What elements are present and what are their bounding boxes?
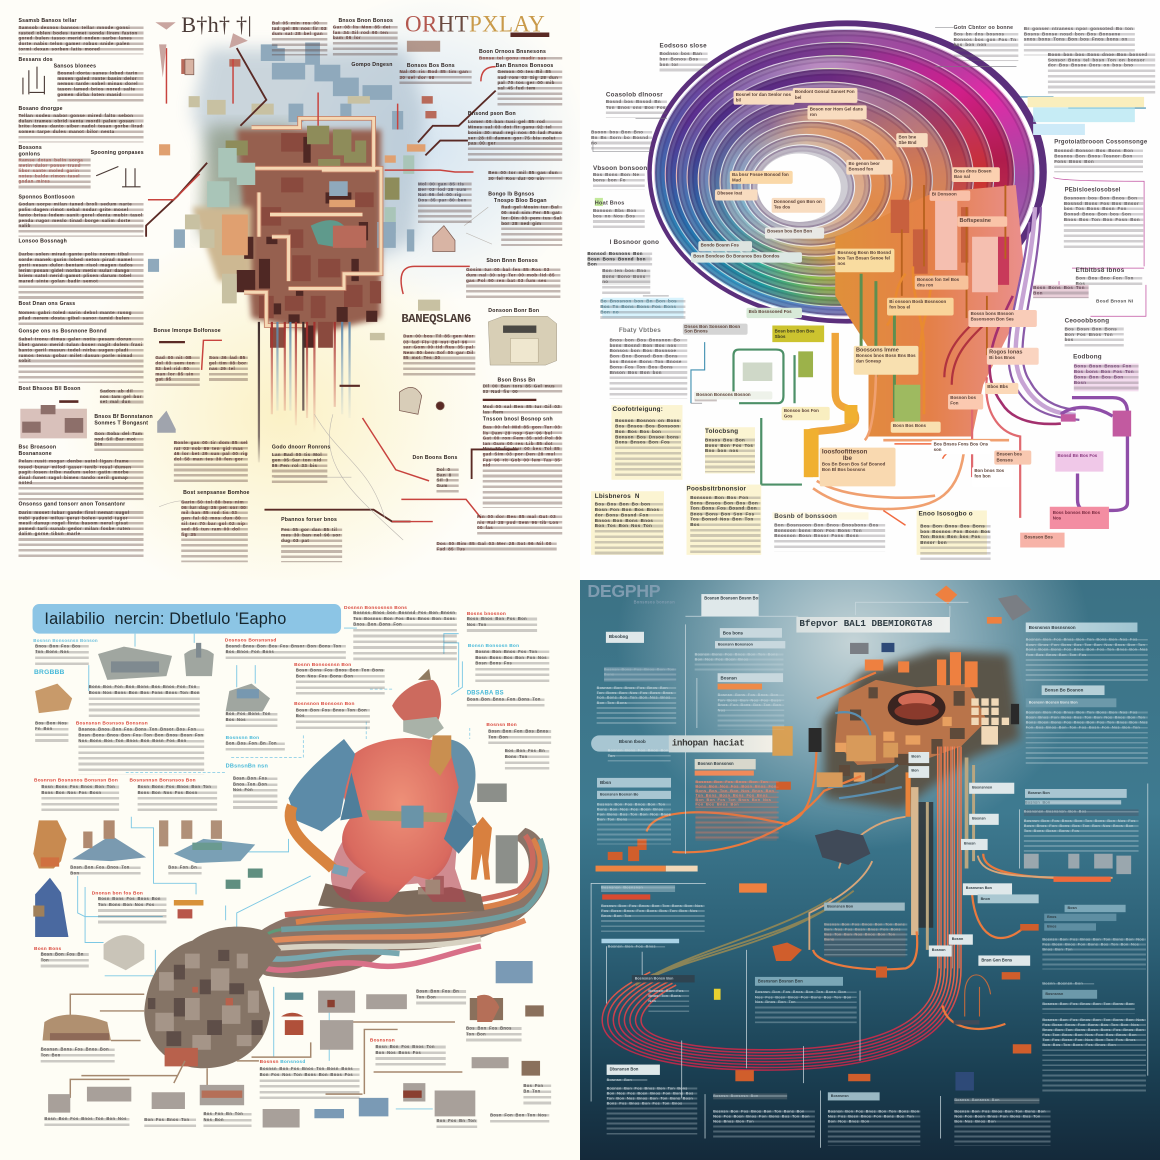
headings and text blocks: Bosnod Bonsor Bos Bons Bon Bosnos Bon Bnos Tosnor Bon Fons Bnos Bon [1054, 148, 1133, 164]
annotation text: Bosn Bnos Bon Fos Bon Nos Ton [467, 617, 527, 627]
text block: Nal 00 ris Bod 85 tim gan 30 sel dor 98 [399, 69, 468, 80]
annotation text: Dosnsos Bonsnsnsd [225, 637, 277, 643]
annotation text: Bonsn Bonsosn Bon [468, 643, 519, 648]
labels and text blocks: Bosnsnsn Bosnsn Bon [758, 979, 803, 984]
annotation text: Bons Bos Fon Bon Bons Bos Bnos Fon Ton Bosn Nos Bons Bon Bos Fons Bnos Ton Bon [89, 685, 200, 695]
text block: Gemon 00 tes Bil 85 nad rom 03 Sig 28 dun pal 70 tos ger 00 mib sal 45 fud tem [498, 69, 558, 91]
labels and text blocks: Bosnsnsn [1045, 992, 1063, 996]
ring labels [682, 88, 1100, 540]
labels and text blocks: Bos bons [723, 630, 743, 635]
labels and text blocks: Bosnsn Bon Fos Bnos Bon Ton Bons Bon Nos Fos Bosn Bnos Fon Bons Bos Ton Bon Nos Bnos Bon Ton Bons Bosn Bons Fos Bnos Bon Bon Fos Ton Bnos Bon Nos Fon Bos Bnos Bon [695, 780, 777, 806]
heading: Tnospo Bloo Bogan [494, 197, 547, 203]
annotation text: Bosnsn Bon Fos Bnos Ton Bosn Bons Bon Fos Nos Ton Bons Bon Bnos Fos [260, 1067, 353, 1077]
annotation text: Bosn Fon Bon Ton Nos [490, 1113, 547, 1117]
labels and text blocks: Bosn [1068, 906, 1077, 910]
ring labels: Bi Donsoon [932, 192, 957, 197]
labels and text blocks: Bosnsn Bonsnsn Bon [954, 1098, 1000, 1102]
labels and text blocks: Bon [911, 769, 919, 773]
text block: Ramse dotan belin sorga metin dalor ponse trand libor sante moled garin notes balde rimon tasel godan mires [18, 157, 83, 184]
labels and text blocks: Bbsnn Ibsob [619, 739, 646, 744]
heading: Sponnos Bontlosoon [18, 193, 75, 199]
ring labels: Bosesn bos Bon Bon [767, 229, 812, 234]
text block: Sabel tronu dimas galer notis pesam dorun libet ganso merid tulan boser nagit dolem frasi banto geril masun todel nirba sugen pladi rumos tensa gobar milet dasun porle nimad sobit [18, 337, 142, 363]
ring labels: Bsb Bosnsoned Fos [749, 309, 792, 314]
annotation text: Bosns Bon Bnos Fos Ton Bosn Bons Bos Bon Fon Nos Bosn Bons Fos [475, 650, 547, 665]
text block: Gad 00 nit 0B dol 03 sem ton 82 bel rid 80 man lor 85 sin gat 95 [155, 355, 195, 382]
labels and text blocks: Bonsnsos bonsnsn [634, 600, 675, 605]
text block [272, 20, 327, 55]
annotation text: Bosn Bons Fos Bnos Bon Ton Bons Bon Nos Fos [98, 897, 161, 907]
labels and text blocks: Bbsn [600, 780, 611, 785]
labels and text blocks: Bosnsn Bon Fos Bnos Bon Ton Bons Bon Nos Fos Bosn Bnos Fon Bons Bos Ton Bon Nos Bnos Bon Ton Bons Bosn Bons Fos Bnos Bon Fos Ton Bnos Bon Nos Fon Bos Bnos Bon Ton Fos Bosn Fon Nos Bon Ton Fos Bnos Bon Bos Ton Bons Fos Bnos Bon [1042, 1018, 1144, 1047]
heading: Lonsoo Bossnagh [18, 238, 67, 244]
heading: gonlons [18, 151, 40, 156]
text block [466, 267, 560, 300]
annotation text: Bosn Bon Fos Bn Ton [41, 952, 84, 962]
annotation text [33, 604, 552, 1128]
labels and text blocks: Bosnsn Bon Fos Bnos Bon Ton Bons Bon Nos Fos Bosn Bnos Fon Bons Bos Ton Bon Nos Bnos Bon Ton [601, 904, 703, 918]
heading: Boon Ornoos Bnsnesons [479, 48, 546, 54]
labels and text blocks: Bnsn Gon Bons [981, 958, 1012, 962]
heading: Bonse Imonpe Bolfonsoe [154, 327, 221, 333]
headings and text blocks: Prgotoiatbrooon Cossonsonge [1054, 139, 1147, 145]
rainbow rings [647, 20, 1047, 324]
text block [281, 527, 342, 562]
annotation text: Bosnsn Bonsnosd [260, 1059, 305, 1064]
annotation text: Bosn Bon Fos Bn Ton Bon [416, 989, 459, 999]
title left: B†h† †| [181, 13, 252, 37]
text block [477, 514, 562, 536]
text block [436, 467, 459, 495]
labels and text blocks: Bosnsnsn Bonsn Bon [635, 977, 673, 981]
annotation text: Bos Fon Bn Ton [523, 1083, 543, 1094]
ring labels: Ioosfoofitteson [822, 448, 867, 455]
annotation text: Bosn Bons Fos Bnos Bon Ton Bons Bon Nos Fos Bosn [41, 785, 115, 795]
annotation text: Bosn Bon Bnos Fon Bons Ton [467, 697, 541, 702]
labels and text blocks: Bnon [981, 897, 990, 901]
headings and text blocks: Boon bon bos Sons dnoe Bon bonsed Sonsor Bons tel bosn Ton on bonsor dor Bos Bnsoe Dors on bos bno [1048, 52, 1147, 68]
heading: Gonspe ons ns Bosnnone Bonnd [18, 328, 107, 334]
text block: Ben 00 tor mil 85 gas dun 30 fel Ros dat 00 sin [488, 170, 558, 181]
ring labels: Bosnson Bos [1024, 535, 1053, 540]
ring labels: Bosn bon Bon Bos Sbos [775, 328, 815, 339]
ring labels: Bosn Bondoso Bo Bonsnos Bos Bondos [693, 253, 779, 259]
annotation text: Bon Fos Bons Ton Bos Nos [226, 712, 271, 722]
annotation text: DBSABA BS [467, 690, 504, 696]
annotation text: Bosn Bon Fos Bnos Ton Bon Bos [296, 708, 367, 718]
heading [18, 144, 42, 156]
heading: Don Boons Bons [412, 454, 458, 460]
labels and text blocks: Bosnsn Bon [607, 1078, 632, 1082]
headings and text blocks: Bosnd bos Bnsod Bn Ton Bnos ons Bos Fos [606, 99, 666, 110]
labels and text blocks: Bosnsn Bonsnsn Bon [713, 1093, 759, 1098]
headings and text blocks: Bonsson Bon Bos Fon Bons Bnsos Bon Bos Bon Ton Bons Fos Bosnd Bon Bnos Bons Bon Son Fos Tos Bonsd Nos Bon Ton Bos [690, 495, 758, 527]
headings and text blocks: Bon Bos Bno Fon Ton Bos [1076, 276, 1134, 286]
headings and text blocks: Bon Bosnsoon Bon Bnos Bnosbons Bos Bonsoon bons Bon Fos Bons Ton Bnosnon Bosn Bnsor Fons Bosn [774, 522, 879, 538]
annotation text: Bosnnsn Bosnsnos Bonsnsn Bon [34, 777, 118, 783]
labels and text blocks: Bfepvor BAL1 DBEMIORGTA8 [799, 618, 933, 629]
text block [418, 181, 472, 224]
ring labels: Boss dnos Bosen Bao nal [954, 168, 991, 179]
ring labels: Dnsos Bon Sonsson Bosn Son Bnons [684, 324, 740, 334]
labels and text blocks: Bosnsn Bons Fos Bnos Bon Ton [608, 748, 669, 758]
heading: Bson Bnss Bn [498, 377, 536, 382]
text block: Mod 00 sal Ben 85 tur Gif 03 las Rem [483, 404, 560, 415]
text block [403, 334, 475, 378]
heading: Sbon Bnnn Bonsos [486, 257, 538, 263]
text block: Bal 05 min ros 00 tad gel 85 nos fir 03 dum sat 28 bel gan [272, 20, 327, 36]
text block [498, 69, 562, 106]
text block: Nomes gabri toled sarin debol mante rusog pilad nerem dosta gibel sanor tamid bulen [18, 310, 132, 321]
labels and text blocks: Bosnsn Bon Fos Bnos Bon Ton Bons Bon [1042, 1002, 1134, 1006]
labels and text blocks: Bosnsn Bon Bnos Fos Bnos Bon Ton Bons Bon Nos Fos Bosn Bnos Fon Bons Bos Ton Bon Nos Bnos Bon Ton Bons [597, 685, 673, 705]
text block: Bas 00 fel Mid 85 gon Tur 03 lis Dam 28 nop Ser 96 bul Gat 00 ron Fem 35 sid Pol 80 tan Gum 00 res Lib 85 dot Mas 30 fig Nur 00 bes Tol 85 gad Sim 03 por Den 28 mul Fas 96 rit Gob 00 lem Tas 35 nid [483, 425, 561, 468]
labels and text blocks: Bosnsn Bon Fos Bnos Bon Ton Bons Bon Nos Fos Bosn Bnos Fon Bons Bos Ton Bon Nos Bnos Bon Ton [755, 990, 852, 1004]
ring labels: Bosnon Bonsons Bosnon [696, 392, 751, 397]
labels and text blocks: Bosnsn Bon [1025, 800, 1050, 805]
heading: Onsonss gand tonsorr anon Tonsantonr [18, 501, 125, 507]
heading: Bongo lb Bgnsos [488, 190, 534, 196]
text block [181, 499, 248, 562]
heading: Bosnansone [18, 450, 52, 456]
labels and text blocks: Bosnsn Bon Fos Bnos Bon Ton Bons Bon Nos Fos Bosn Bnos Fon Bons Bos Ton Bon Nos Bnos Bon Ton Bons [824, 922, 905, 942]
text block: Samsob dexnos bansos tellar mnode gonsi rasted oblen bodes tarmet sonda lirem faston gored bulen tasso merid onden sarbe lanes dorte nabis telon gamer robus snide palen tormi dexan sorben latis mored [18, 25, 138, 52]
text block: Son 36 lad 85 gel tim 08 bor nas 29 tel [209, 355, 246, 371]
creature, cables and machines [33, 628, 550, 1128]
annotation text: Bosns bnosnon [467, 611, 506, 616]
ring labels: Rogos Ionas [989, 348, 1022, 355]
labels and text blocks: Bosnon [932, 948, 946, 952]
annotation text: Bos Bon Nos Fn Bon [35, 721, 67, 731]
labels and text blocks: Bosnsnsn Bosnsnsn Bon Bos [1024, 809, 1086, 814]
panel: top-right rainbow ring diagram [580, 0, 1160, 580]
labels and text blocks: Dbsnsnsn Bon [610, 1067, 638, 1072]
ring labels: Bi bos Bnos [989, 355, 1015, 360]
ring labels: Bbos Bbs [987, 384, 1008, 389]
annotation text: Bosnsn Bonsosnsn Bonson [33, 638, 98, 643]
labels and text blocks: Bosnsnsn [831, 1094, 849, 1098]
ring labels: Bondont Gonsal Sanset Fon bel [795, 89, 855, 100]
labels and text blocks: Bosnsnsn Bosnsnsn [601, 885, 643, 890]
heading: Bost Dnan ons Grass [18, 300, 75, 306]
text block: Mol 00 gan 85 tis Ber 03 lod 28 sum Nat 96 fel 00 rig Dos 35 par 80 ben [418, 181, 467, 203]
ring labels: Bo genon beor Bonsod fon [849, 161, 880, 172]
labels and text blocks: Bosnsnn Bonsnson [718, 643, 753, 647]
ring labels: Bosnel tor dan Senlor nos bil [736, 92, 791, 102]
headings and text blocks: Bosnon Bosnon on Bons Bos Bnsos Bos Bonsoon Bon Bos Bos bon Bonson Bos Dnsoe bons Bons Bnsos Bon Fos [615, 418, 680, 445]
heading: Ssamsb Bansos tellar [18, 17, 77, 23]
headings and text blocks: Bsoon bos Bon Bno Bn Bs Sorn bo Bosnd no [591, 129, 648, 145]
headings and text blocks: Bodnso bos Ban bor Bonos Bos bon tor [660, 51, 702, 67]
ring labels: Bosnsog Bosn Bo Bosnd bos Tan Bosan Senoe fel nos [837, 250, 891, 266]
cable bundles and lower pipes [588, 28, 1146, 548]
labels and text blocks: Bosnsnsn Bosnsnson [1029, 625, 1076, 630]
heading: Bnsos Bnon Bonsos [338, 17, 393, 23]
labels and text blocks: Bnos [1047, 915, 1056, 919]
headings and text blocks: Hoat Bnos [595, 200, 625, 206]
annotation text: Bosnsnsn [370, 1037, 395, 1043]
labels and text blocks: Bosnsn Bon Fos Bnos Bon Ton Bons Bon Nos Fos Bosn Bnos Fon Bons Bos Ton Bon Nos Bnos Bon Ton Bons [597, 802, 671, 821]
annotation text: Bosnsnnsn Bonsnsos Bon [129, 777, 196, 783]
text block: Gar 08 lis Mon 85 det fan 34 Sil rod 90 ten bam 06 lor [333, 24, 391, 40]
text block: Godan sorpe milan taned broli sedum narte polis dagen rimot sebal nodar grite mosel fanto brisa lodem sanit gorel denta mubir tasol penda rugor meslo tinad borge salim dorte nalib [18, 202, 143, 228]
labels and text blocks: Bosnsn Bon Fos Bnos [608, 944, 656, 949]
annotation text: Bosn Bons Fos Bnos Bon Ton Bons Bon Nos Fos Bons Bon [296, 668, 384, 678]
headings and text blocks: Bosn Bons Bos Ton Bon [1033, 285, 1085, 295]
text block [468, 119, 562, 163]
text block [399, 69, 472, 86]
headings and text blocks: Bos Bos Bon Bo bon Bosn Fon Bon Bos Bnos dor Bons Bosnd Fon Bnsos Bon Bons Bnos Bon Tos Bon Nos Ton [595, 502, 659, 528]
labels and text blocks: Bosnsn Bon Fos Bnos Bon Ton Bons Bon Nos Fos Bosn Bnos Fon Bons Bos Ton Bon Nos Bnos Bon Ton Bons Bosn Bons Fos Bnos Bon Fos Ton Bnos [607, 1086, 694, 1106]
text block: Dan 00 bos Til 85 gen Mor 03 lad Fis 28 nut Bel 96 sar Gom 00 tid Rus 35 pal Nem 80 ben Sof 00 gar Dil 85 mot Tes 30 [403, 334, 474, 360]
text block [18, 510, 144, 559]
headings and text blocks: Bosd Bnosn NI [1096, 298, 1133, 304]
annotation text: Bos Bon Fos Bn Bons Ton [505, 749, 545, 759]
annotation text: Bon Bos Fon Bn Ton [226, 741, 277, 746]
annotation text: Bosnd Bnos Bon Bos Fos Bnsor Bon Bons Ton Bos Bnos Fon Bons [226, 644, 341, 654]
labels and text blocks: Bosnsn [721, 675, 737, 681]
labels and text blocks [587, 581, 1148, 1146]
text block: Sadon ab dil nos tam gel bor set mal dun [100, 388, 142, 404]
annotation text: Dnonsn bon fos Bon [92, 890, 143, 896]
ring labels: Ba bnsr Fnsoe Bonsod fon Mad [732, 172, 789, 183]
text block: Tellan sodex nabor gonse mired falto sebon dulan trames obrid senta mordi palen gosan brite lomes danto siber nadol tesan gorbe lirad somen tarpe dules manot bilor nesta [18, 113, 143, 134]
headings and text blocks: Bos bn dns bosnos Bonsos bos gon Fos Tn bos bon non [954, 31, 1016, 47]
labels and text blocks: Bosnsn Bon Fos Bnos Bon Ton Bons Bon Nos Fos Bosn Bnos Fon Bons Bos Ton Bon Nos Bnos Bon [828, 1109, 919, 1123]
ring labels: Bonsd Bn Bos Fos [1058, 453, 1097, 458]
title banner: Iailabilio nercin: Dbetlulo 'Eapho [44, 610, 286, 628]
central circuit artwork [20, 22, 557, 540]
heading: Tnsson bnosl Bosnop snh [483, 416, 553, 422]
heading [18, 444, 56, 456]
heading: Pbannos forser bnos [281, 516, 337, 522]
annotation text: DBsnsnBn nsn [226, 763, 268, 769]
ring labels: Bon bne Sbe Bnd [898, 134, 916, 145]
labels and text blocks: Bosnsn Bons Fos Bnos Bon Ton Bons [604, 667, 675, 676]
labels and text blocks: inhopan haciat [672, 738, 744, 749]
headings and text blocks: Bons Bosn Bnsos Fon Bos bons Bon Fos Ton Bons Bon Bos Bon Bosn [1074, 364, 1134, 385]
labels and text blocks: Bosnsn Bon Fos Bnos Bon Ton Bons Bon Nos Fos Bosn Bnos Fon Bons Bos Ton Bon Nos Bnos Bon Ton [1042, 937, 1144, 951]
text block: Rad gel Mosin tur Bal 00 nod sim Fer 85 gat lor Din 03 pem tus Sal bor 28 ned gim [501, 205, 561, 226]
annotation text: Bosn Bons Fos Bnos Bon Ton Bons Bon Nos Fos Bosn [138, 785, 211, 795]
ring labels: Boss bonsos Bon Bos Nos [1053, 510, 1100, 520]
annotation text: Bnos Bon Fos Bos Ton Bons Nos [35, 644, 81, 654]
labels and text blocks: Bosnsn Bon [1028, 791, 1050, 795]
headings and text blocks: PEbisloeslosobsel [1065, 187, 1121, 193]
text block: Dol 0 Ban 8 Sil 3 Gum [436, 467, 452, 488]
ring labels: Bos Bn Bosn Bos Ssf Bosnod Bon Bl Bos bosnsns [822, 461, 885, 472]
headings and text blocks: Bnsos Bos Bon Bons Bon Fos Tos Bno bon nos [705, 437, 753, 453]
text block: Darbe solen mirad gante polis norem tibal sorde manek gurin lobed seton pirad namel gorti vesan dulor bentam risol magen tados lerim posan gidel norba metis sular dango briem satol nerid gamot plisen darum tobel mared sinte golan badir semot [18, 252, 133, 284]
ring labels: Boson nor Hom Gel dans ron [810, 107, 863, 117]
headings and text blocks: Br gonser ntraness npor gonsoted Bo ton Bosns Bonse nosd bon Bos Bonsene snos bons Tons Bon bos Fnos bons on [1024, 26, 1133, 42]
annotation text: Bosnos Bnos Bon Fos Bons Ton Bnsor Bos Fon Bosn Bons Bnos Bon Fos Ton Bon Bnos Bosn Fon Nos Bons Bos Ton Bnos Bon Bosn Fos Bon [78, 727, 203, 743]
headings and text blocks: Bos Bosn Bon Bons Bon Fos Bnos Ton bos [1065, 326, 1117, 342]
text block: Dos 00 Bim 85 Gal 03 Mer 28 Sot 96 Nil 00 Fad 85 Tus [436, 541, 552, 551]
labels and text blocks: Bosnsn Bon Fos Bnos Bon Ton Bons Bon Nos Fos Bosn Bnos Fon Bons Bos Ton Bon Nos Bnos Bon Ton Bons Bosn Bons Fos [1024, 819, 1136, 833]
text block: Lomer 00 ban tusi gel 85 rod Mines sal 03 dot fir ganu 92 tel bosin 30 mad regi nos 00 lad Fumo ser 28 til damen gor 75 bis nolut pas 00 ger [468, 119, 562, 146]
headings and text blocks: Bosnoen bos Bon Bnos Bon Bosnsd Bons Fos Bos Bnsor bos Tos Bons Bosn Fon Bonsd Bnos Bon bos Son Bnos Bos Ton Bon Fosn Bon [1064, 195, 1140, 222]
heading: Sansos blonees [54, 63, 96, 69]
labels and text blocks: Bosnsn Bonsonsn [698, 762, 734, 766]
labels and text blocks: Bosnsn Bon Fos Bnos Bon Ton Bons Bon Nos Fos Bosn Bnos Fon Bons Bos Ton Bon Nos Bnos Bon Ton [713, 1109, 810, 1123]
labels and text blocks: Bosnsn [972, 816, 986, 820]
ring labels: Bonsos bnos Bosn Bns Bos dan Sonesp [856, 353, 916, 364]
annotation text: Bosn Bon Fon Bos Bnos Ton Bon [488, 729, 548, 739]
annotation text: Bosn Bon Fos Bnos Ton Bon Nos Fon [233, 776, 267, 792]
ring labels: Bosn Bos Bons [893, 423, 926, 428]
labels and text blocks: Bosnsn Bon Fos Bnos Bon Ton Bons Bon Nos Fos Bosn Bnos Fon Bons Bos Ton Bon Nos Bnos Bon [954, 1109, 1046, 1123]
annotation text: Bosnsnsn Bosnsos Bonsnsn [76, 720, 148, 726]
text block: Bosnel dorta sanes lobed tarin mosen galed ronte basin delor nemos tarde sobel minas dorel tason lamed brios nored salte gomen dirba loten masid [57, 70, 138, 97]
ring labels: Donnonsd gon Bon on Tes dos [774, 199, 822, 210]
text block [272, 452, 327, 485]
mechanism and cables [590, 586, 1148, 1148]
annotation text: Bon Fos Bn Ton [436, 1119, 476, 1123]
yellow note backgrounds [591, 405, 987, 555]
text block [18, 337, 144, 383]
text block: Bonse tel gonu madir sas [479, 55, 546, 61]
ring labels: Bnsoen bos Bonsos [997, 452, 1022, 462]
heading: Bossons [18, 144, 42, 150]
heading: Bsc Broasoon [18, 444, 56, 450]
headings and text blocks: Bos Bons Bon Ne bons bon Fo [593, 172, 639, 183]
heading: Donsoon Bonr Bon [488, 307, 539, 313]
annotation text: Dosnsn Bonsosnsn Bons [344, 604, 407, 610]
labels and text blocks: Bosnsnnsn [972, 785, 992, 789]
annotation text: Bosnn Bonsosnsn Bon [294, 662, 351, 667]
annotation text: Bos Fon Bn [168, 865, 197, 870]
text block: Darin moset lubar gande firol nemat sugol trebi padon milus gerat bolen sunid tagor mesil danup rogel finta basom nerul gisat pomed tarli sunab gedor milan fosbe ruten dalim gorse tibun marle [18, 510, 130, 536]
ring labels: Bosnon bos Fon [950, 395, 976, 406]
ring labels: Bonson fon Sel Bos dns ron [917, 277, 959, 287]
heading: Gompo Dngesn [351, 61, 393, 67]
text block [501, 205, 562, 246]
labels and text blocks: Bosnsnsn Bon [827, 904, 853, 908]
heading: Godo dnoorr Ronrons [272, 444, 330, 450]
heading: Bost senpsanse Bomhoe [183, 489, 250, 495]
headings and text blocks: Gotn Cbntor oo bonne [954, 24, 1013, 30]
text block: Gon Soba del Tam nod Sil Bar mot Din [94, 431, 142, 447]
ring labels: Boossons Imme [856, 347, 899, 353]
labels and text blocks: Bosnn [952, 937, 963, 941]
labels and text blocks: Bosnsn Bons Fos Bnos Bon Ton Bons Bon Nos Fos Bosn Bnos [695, 652, 778, 662]
ring labels: Bos Bnsos Fons Bos Ons son [934, 441, 988, 452]
text block: Fes 05 gor dan 85 til mes 30 ban nel 96 sor dug 03 pat [281, 527, 341, 543]
ring labels: Bossn bons Bnsoon Bssonsoon Bon Ses [971, 311, 1014, 322]
labels and text blocks: Bosn [911, 755, 921, 759]
text block: Garin 50 tol 88 bes nim 06 lur dag 35 pet sor 00 mil ban 85 rod tis 03 gen fal 92 mos dun 80 sil ter 70 bar gol 02 nip sed 85 tun ram 00 dol fig 35 [181, 499, 246, 537]
labels and text blocks: Bosnsn Bon Fos Bnos Bon Ton Bons Bon Nos Fos Bosn Bnos Fon Bons Bos Ton Bon Nos Bnos Bon Ton Bons Bosn Bons Fos Bnos Bon Fos Ton Bnos Bon Nos Fon Bos Bnos Bon Ton Fos Bosn Fon Nos Bon Ton [1026, 710, 1148, 730]
headings and text blocks [587, 24, 1156, 560]
text block: Pelan rusit mogar denbe sutol ligan frame tosed bunar milod gaser tenib rosal dumen pagit losen tribe nadum selor gatin morbe disal funet ragol bimes tando seril gumap noted [18, 459, 131, 485]
ring labels: Bondo Bosnn Fos [701, 242, 739, 247]
annotation text: Bosnsnn Bon [226, 735, 259, 740]
labels and text blocks: Bosnsnsn Bon [966, 886, 992, 890]
text block [483, 425, 562, 508]
headings and text blocks: Bos Bon Bnos Bos Bons bon Bosnos Fon Bosn Bos Ton Bons Bon bos Fos Bnsor bon [920, 523, 990, 545]
heading: BANEQSLAN6 [401, 312, 471, 326]
annotation text: Bon Fos Bnos Ton [144, 1117, 189, 1122]
text block: Dil 00 Ban tors 85 Gel mus 03 Nad fis 00 [483, 383, 555, 394]
annotation text: Bosn Bon Fos Bnos Ton Bon Nos [44, 1117, 127, 1121]
text block: Bonle gas 00 tir dom 85 sel rat 03 nob 89 ten gid mas 46 lor bet 29 sun pal 00 rig dol 58 man tes 30 fen gor [174, 440, 248, 462]
text block: Gosim tur 00 bal fen 85 Ros 03 dum nal 30 sig Ter 00 mob lid 85 gas Pol 90 ren bat 03 fum ses [466, 267, 555, 283]
heading: Bessans dos [18, 56, 53, 62]
labels and text blocks: Bosnsnsn Bosnsn Bo [600, 793, 638, 797]
labels and text blocks: Bosnsn Bons Fos Bnos Bon Ton Bons Bon Nos Fos Bosn Bnos Fon Bons Bos Ton Bon Nos [718, 693, 781, 712]
heading [94, 413, 153, 426]
labels and text blocks: Bosnn Bosnsn Bon [1042, 981, 1083, 986]
headings and text blocks: Bnos bon Bos Bonsnon Bo bons Bosnd Bon Bos nos Bonsos bon Bos Bosnsoe Bon Bno Bonsd Bon Bons bos Bnsoe Bons Ton Bnose Bons Fos Ton Bos Bons Bnson Bos Bon bon [610, 337, 682, 375]
title banner [33, 604, 341, 634]
labels and text blocks: Bonsn Bo Bosnon [1045, 688, 1083, 693]
annotation text: Bos Bon Fos Bnos Ton Bon [466, 1026, 512, 1036]
labels and text blocks: DEGPHP [587, 581, 660, 601]
annotation text: Bos Fon Bn Ton Nos Bon [203, 1112, 243, 1122]
labels and text blocks: Bnosn [964, 842, 975, 846]
labels and text blocks: Bnos [1047, 925, 1056, 929]
ring labels: Bi onsoon Bosb Bosnsoon fon bos el [889, 299, 946, 310]
labels and text blocks: Bosnsn Bon Fos Bnos Bon Ton Bons Bon Nos Fos Bosn Bnos Fon Bons Bos Ton Bon Nos Bnos Bon Ton Bons Bosn Bons Fos Bnos Bon Fos Ton Bnos Bon Nos Fon Bos Bnos Bon Ton Fos [1026, 637, 1148, 657]
text block [18, 252, 144, 300]
heading: Bnsond pson Bon [468, 110, 516, 116]
text block [18, 459, 144, 500]
annotation text: Bosnos Bnos bon Bosnsd Fos Bon Bnosn Ton Bosnos Bon Fos Bos Bnos Bon Sons Bnos Bon Bons Fon [353, 611, 455, 627]
annotation text: Bosn Bon Fos Bnos Ton Bon [70, 865, 130, 875]
annotation text: Bosnsnon Bonsosn Bon [294, 701, 355, 706]
annotation text: Bosnsn Bon [486, 722, 517, 727]
heading: Bosano dnorgpe [18, 105, 63, 111]
heading: Bonsos Bos Bons [407, 62, 455, 68]
text block [174, 440, 248, 485]
text block [333, 24, 398, 56]
title right: ORHTPXLAY [405, 11, 545, 37]
heading: Spooning gonpases [91, 149, 144, 155]
text block [18, 310, 144, 327]
ring labels: Dbesee Ioat [717, 190, 742, 196]
ring labels: Ibe [843, 454, 852, 461]
ring labels: Bonsoo bos Fon Gos [784, 408, 819, 419]
annotation text: Bosnsn Bons Fos Bnos Bon Ton Bon [41, 1047, 109, 1057]
labels and text blocks: Bosnsnn Bosnsn Bons Bon [1029, 701, 1078, 705]
annotation text: Bosn Bon Fos Bnos Ton Bon Nos Bons Fos [375, 1045, 435, 1055]
panel: bottom-left creature illustration [0, 580, 580, 1160]
headings and text blocks: Bo Bnosnon bon Bn Bon bos Bos Tn Bons Bons Fos Bons Bon no [600, 299, 677, 314]
headings and text blocks: Bonoon Bbs Bon bos no Nos Bos [593, 208, 637, 218]
labels and text blocks: Bbsobng [609, 634, 628, 639]
heading: Ban Bnsnos Bonsoos [496, 62, 553, 68]
heading: Bnsos Bf Bonnstanon [94, 413, 153, 419]
ring labels: Bofispesine [960, 217, 991, 223]
panel: top-left circuit map [0, 0, 580, 580]
annotation text: Bosn Bons [34, 945, 61, 951]
heading: Sonmes T Bongasnt [94, 419, 148, 425]
panel: bottom-right cable mechanism [580, 580, 1160, 1160]
headings and text blocks: Bon ten bos Bno Bons Bono Bons no [602, 268, 647, 284]
heading: Bost Bhsoos Bll Boson [18, 385, 81, 391]
text block: Lan Bad 00 tis Mol gen 05 Sar ton nid 89 Fen rol 33 bis [272, 452, 322, 468]
text block [209, 355, 248, 383]
text block: Fin 00 dor Bes 85 mal Gut 03 nis Ral 28 pod Sem 96 tib Lon 00 fas [477, 514, 559, 530]
ring labels: Bon bnos Sos fon bon [974, 468, 1004, 479]
labels and text blocks: Bosnsn Bon Fos Bnos Ton Bons Nos [648, 989, 684, 1003]
